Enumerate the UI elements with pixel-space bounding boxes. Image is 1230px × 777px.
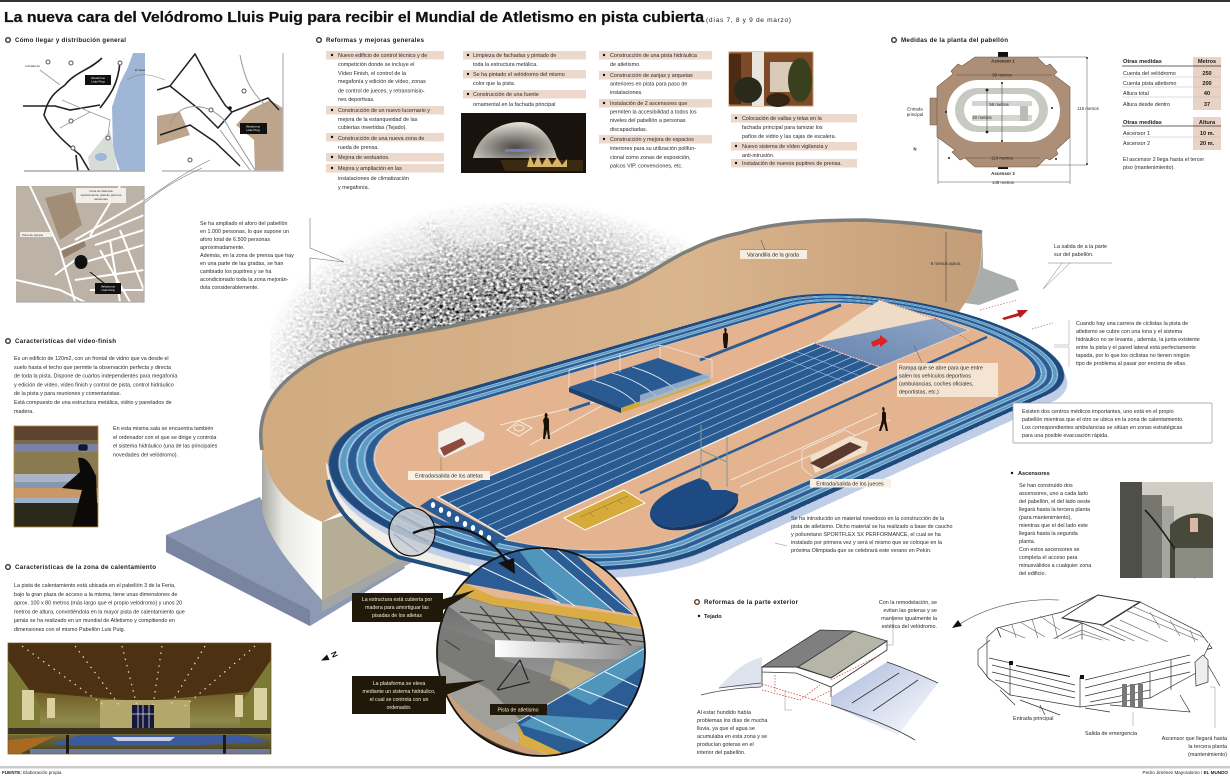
text: remodelling: evitan las goteras y se [883, 608, 937, 614]
callout: south exit pointer [1043, 263, 1112, 289]
text: new surface material [775, 516, 953, 554]
panel: exterior reforms [695, 595, 1227, 758]
body text: Se han construido dos [1019, 483, 1073, 489]
map: neighbourhood: Velodromo [101, 284, 115, 288]
label: hydraulic platform [352, 676, 485, 714]
table: other measures: 10 m. [1200, 131, 1215, 137]
bullets [331, 54, 737, 169]
plan dimension labels: 145 metros [992, 180, 1015, 185]
plan labels: Ascensor 1 [991, 58, 1015, 64]
section marker [892, 38, 896, 42]
text: capacity: aproximadamente. [200, 245, 245, 251]
text: sunken roof: producían goteras en el [697, 742, 754, 748]
label: lift: (mantenimiento) [1188, 752, 1227, 758]
map: region [19, 53, 146, 172]
column 2 text: Limpieza de fachadas y pintado de [473, 53, 556, 59]
column 2 text: toda la estructura metálica. [473, 62, 538, 68]
text: south exit: La salida de a la parte [1054, 244, 1107, 250]
label: athletes entrance [408, 458, 490, 480]
north marker [320, 650, 340, 663]
table: other measures: Otras medidas [1123, 120, 1162, 126]
table: other measures: 20 m. [1200, 141, 1215, 147]
label: judges entrance [810, 470, 891, 488]
callout box: medical [1013, 403, 1212, 443]
callout bracket: capacity [310, 218, 344, 290]
column 4 text: anti-intrusión. [742, 153, 774, 159]
table: other measures: Cuenta pista atletismo [1123, 81, 1176, 87]
table: other measures [1122, 57, 1221, 150]
body text: dimensiones con el mismo Pabellón Luis Puig. [14, 627, 125, 633]
body text: de la pista y para reuniones y comentaristas. [14, 391, 121, 397]
label: wall height: 6 metros aprox. [931, 261, 961, 266]
column 3 text: de atletismo. [610, 62, 641, 68]
label: athletes entrance: Entrada/salida de los atletas [415, 474, 483, 480]
field white lines [500, 385, 890, 487]
title dates: (días 7, 8 y 9 de marzo) [706, 17, 791, 24]
label: wood cover: pisadas de los atletas [372, 613, 422, 619]
column 1 text: Mejora de vestuarios. [338, 155, 390, 161]
column 4 text: fachada principal para tamizar los [742, 125, 823, 131]
label: ramp: (ambulancias, coches oficiales, [899, 382, 974, 388]
column 1 text: megafonía y edición de vídeo, zonas [338, 79, 426, 85]
note: lift 2: El ascensor 2 llega hasta el tercer [1123, 157, 1204, 163]
leader lines [1040, 687, 1215, 728]
body text: La pista de calentamiento está ubicada en el pabellón 3 de la Feria, [14, 583, 176, 589]
text: cyclists: Cuando hay una carrera de ciclistas la pista de [1076, 321, 1188, 327]
panel: warm-up zone [6, 564, 271, 754]
column 1 text: Mejora y ampliación en las [338, 166, 402, 172]
side text: En esta misma sala se encuentra también [113, 426, 213, 432]
side text: el sistema hidráulico (una de las principales [113, 444, 218, 450]
section marker [317, 38, 321, 42]
label: main entrance: Entrada principal [1013, 716, 1053, 722]
text: remodelling: estética del velódromo. [882, 624, 937, 630]
panel: zoom lens on hydraulic platform [352, 508, 645, 770]
athlete entry tunnel [438, 421, 485, 458]
label: ramp: Rampa que se abre para que entre [899, 366, 983, 372]
body text: minusválidos a cualquier zona [1019, 563, 1091, 569]
text: sunken roof: problemas los días de mucha [697, 718, 767, 724]
plan dimension labels: 115 metros [1077, 106, 1100, 111]
column 3 text: Construcción de zanjas y arquetas [610, 73, 693, 79]
plan dimension labels: principal [907, 112, 923, 117]
column 3 text: discapacitadas. [610, 127, 647, 133]
column 1 text: Nuevo edificio de control técnico y de [338, 53, 427, 59]
heading: Ascensores [1018, 471, 1050, 477]
arrow to lens [413, 527, 515, 574]
column 3 text: cional como zonas de exposición, [610, 155, 691, 161]
text: capacity: en una parte de las gradas, se han [200, 261, 283, 267]
column 2 text: Construcción de una fuente [473, 92, 539, 98]
label: wood cover: madera para amortiguar las [365, 605, 429, 611]
body text: llegará hasta la segunda [1019, 531, 1078, 537]
arrow: to roof detail [952, 600, 1059, 628]
heading: Reformas y mejoras generales [326, 37, 425, 44]
text: capacity: Se ha ampliado el aforo del pabellón [200, 221, 288, 227]
text: south exit: sur del pabellón. [1054, 252, 1094, 258]
table: other measures: 40 [1204, 91, 1210, 97]
opening ramp [815, 300, 975, 367]
body text: Con estos ascensores se [1019, 547, 1080, 553]
fascia black marks [1009, 661, 1084, 679]
column 1 text: instalaciones de climatización [338, 176, 409, 182]
track side wall [326, 462, 470, 575]
body text: y edición de vídeo, vídeo finish y control de pista, control hidráulico [14, 382, 174, 388]
body text: del edificio. [1019, 571, 1046, 577]
text: sunken roof: lluvia, ya que el agua se [697, 726, 755, 732]
map: neighbourhood: asistentes [94, 197, 108, 201]
drawing: pavilion exterior [978, 595, 1220, 715]
photo: illuminated dome [461, 113, 586, 173]
body text: jamás se ha realizado en un mundial de Atletismo y compitiendo en [13, 618, 175, 624]
column 3 text: niveles del pabellón a personas [610, 118, 686, 124]
body text: Está compuesto de una estructura metálica, vidrio y panelados de [14, 400, 172, 406]
column 1 text: mejora de la estanqueidad de las [338, 117, 418, 123]
body text: (para mantenimiento), [1019, 515, 1072, 521]
column 1 text: competición donde se incluye el [338, 62, 414, 68]
map: neighbourhood: Aparcamiento gratuito para los [81, 193, 122, 197]
side text: novedades del velódromo). [113, 452, 178, 458]
main straight lanes [438, 343, 880, 537]
column 3 text: Instalación de 2 ascensores que [610, 101, 687, 107]
text: new surface material: Se ha introducido un material novedoso en la construcción de la [791, 516, 944, 522]
body text: planta. [1019, 539, 1035, 545]
column 2 text: Se ha pintado el velódromo del mismo [473, 72, 565, 78]
photo: warm-up hall [8, 643, 271, 754]
footer rule [0, 766, 1230, 768]
plan dimension labels: 99 metros [992, 72, 1013, 78]
column 3 text: palcos VIP, convenciones, etc. [610, 164, 683, 170]
label: judges entrance: Entrada/salida de los jueces [816, 482, 884, 488]
athlete silhouette 3 [879, 407, 888, 431]
column 1 text: nes deportivas. [338, 97, 375, 103]
lens outline [437, 548, 645, 756]
column 4 text: paños de vidrio y las cajas de escalera. [742, 134, 836, 140]
label: ramp: salen los vehículos deportivos [899, 374, 971, 380]
athlete silhouette 2 [723, 328, 728, 348]
running track glow [332, 372, 1068, 578]
side text: el ordenador con el que se dirige y controla [113, 435, 216, 441]
long jump pit [564, 490, 645, 530]
panel: video finish [6, 338, 218, 527]
map: neighbourhood: Zona de parque [22, 233, 44, 237]
column 1 text: Construcción de una nueva zona de [338, 136, 424, 142]
north marker: N [329, 650, 340, 659]
enlarged view [437, 548, 645, 770]
column 4 text: Nuevo sistema de vídeo vigilancia y [742, 144, 828, 150]
column 2 text: ornamental en la fachada principal [473, 102, 555, 108]
column 1 text: de control de jueces, y retransmisio- [338, 88, 425, 94]
label: lift 2: Ascensor 2 [991, 171, 1015, 176]
top rule [0, 0, 1230, 2]
text: new surface material: y poliuretano SPORTFLEX SX PERFORMANCE, el cual se ha [791, 532, 941, 538]
pole vault mats [569, 345, 712, 413]
callout box: medical: pabellón mientras que el otro se ubica en la zona de calentamiento. [1022, 417, 1184, 423]
bullet [698, 615, 700, 617]
body text: madera. [14, 409, 34, 415]
source: FUENTE: Elaboración propia [2, 770, 62, 775]
athlete silhouette 1 [543, 413, 550, 439]
arrow: exit direction [980, 300, 1053, 329]
high jump mat [650, 425, 738, 530]
map: region: Velodromo [91, 76, 105, 80]
label: hydraulic platform: La plataforma se eleva [373, 681, 425, 687]
label: wall height [931, 232, 961, 302]
label: ramp [897, 345, 998, 397]
column 1 text: Construcción de un nuevo lucernario y [338, 108, 430, 114]
body text: mientras que el del lado este [1019, 523, 1088, 529]
column 1 text: cubiertas invertidas (Tejado). [338, 125, 407, 131]
text: cyclists: hidráulico no se levanta , además, la junta existente [1076, 337, 1200, 343]
plan dimension labels [907, 72, 1100, 185]
base slab under the velodrome [166, 497, 416, 626]
heading: Características del vídeo-finish [15, 338, 116, 345]
body text: completa el acceso para [1019, 555, 1077, 561]
text: capacity: cambiado los pupitres y se ha [200, 269, 271, 275]
callout box: medical: Existen dos centros médicos importantes, uno está en el propio [1022, 409, 1174, 415]
table: other measures: Metros [1198, 59, 1216, 65]
map: region: Lufriada de [25, 64, 40, 68]
table: other measures: Altura desde dentro [1123, 102, 1170, 108]
text: new surface material: próxima Olimpiada que se celebrará este verano en Pekín. [791, 548, 932, 554]
column 3 text: instalaciones. [610, 90, 643, 96]
section marker [695, 600, 699, 604]
text: sunken roof: Al estar hundido había [697, 710, 751, 716]
plan dimension labels: N [913, 146, 917, 152]
velodrome floor and banked wall [261, 220, 1019, 545]
table: other measures: Altura [1199, 120, 1216, 126]
discus circle [507, 421, 532, 436]
heading: Características de la zona de calentamiento [15, 564, 156, 571]
table: other measures: 250 [1202, 71, 1212, 77]
small detail circle [389, 508, 435, 556]
body text: bajo la gran plaza de acceso a la misma, tiene unas dimensiones de [14, 592, 177, 598]
credit: Pedro Jiménez Mayoralomo / EL MUNDO [1143, 770, 1228, 775]
table: other measures: 37 [1204, 102, 1210, 108]
label: emergency exit: Salida de emergencia [1085, 731, 1137, 737]
note: lift 2: piso (mantenimiento). [1123, 165, 1175, 171]
crowd in the stands [270, 203, 688, 390]
section marker [6, 565, 10, 569]
photo: interior room [729, 52, 813, 107]
body text: de toda la pista. Dispone de cuartos independientes para megafonía [14, 374, 177, 380]
start dots [420, 498, 506, 548]
plan drawing [930, 52, 1088, 184]
body text: aprox. 100 x 80 metros (más largo que el propio velódromo) y unos 20 [14, 601, 182, 607]
map: city [157, 53, 283, 171]
text: capacity: Además, en la zona de prensa que hay [200, 253, 294, 259]
column 1 highlight bars [326, 51, 857, 172]
table: other measures: Ascensor 2 [1123, 141, 1150, 147]
text: cyclists: atletismo se cubre con una lona y el sistema [1076, 329, 1182, 335]
text: cyclists: tapada, por lo que los ciclistas no tienen ningún [1076, 353, 1190, 359]
column 3 text: Construcción de una pista hidráulica [610, 53, 697, 59]
column 2 text: color que la pista. [473, 81, 515, 87]
panel: track field details [420, 300, 987, 548]
map: region: Lluis Puig [91, 80, 105, 84]
panel: general reforms [317, 37, 857, 191]
judges entry tunnel [802, 430, 868, 476]
text: cyclists: tipo de problema al pasar por encima de ellas. [1076, 361, 1187, 367]
text: new surface material: pista de atletismo. Dicho material se ha realizado a base de caucho [791, 524, 953, 530]
photo: control room [14, 426, 98, 527]
table: other measures: Ascensor 1 [1123, 131, 1150, 137]
drawing: roof section [701, 620, 938, 740]
label: lift: la tercera planta [1188, 744, 1227, 750]
emergency doors [1122, 684, 1143, 707]
callout bracket: cyclists [1054, 320, 1069, 367]
panel: floor plan measures [892, 37, 1221, 185]
column 3 text: anteriores en pista para paso de [610, 82, 687, 88]
column 4 text: Colocación de vallas y telas en la [742, 116, 822, 122]
map: city: Lluis Puig [246, 128, 260, 132]
title: La nueva cara del Velódromo Lluis Puig para recibir el Mundial de Atletismo en pista cubierta [4, 9, 705, 26]
callout box: medical: para una posible evacuación rápida. [1022, 433, 1109, 439]
map: neighbourhood [16, 186, 144, 302]
label: banked rim: Varandilla de la grada [747, 252, 799, 258]
text: new surface material: instalado por primera vez y será el mismo que se coloque en la [791, 540, 942, 546]
label: wood cover [352, 590, 475, 622]
body text: suelo hasta el techo que permite la observación perfecta y directa [14, 365, 171, 371]
section marker [6, 38, 10, 42]
body text: metros de altura, convirtiéndola en la mayor pista de calentamiento que [14, 609, 185, 615]
text: cyclists: entre la pista y el pared lateral está perfectamente [1076, 345, 1196, 351]
label: ramp: deportistas, etc.) [899, 390, 939, 396]
body text: llegará hasta la tercera planta [1019, 507, 1090, 513]
table: other measures: 200 [1202, 81, 1212, 87]
plan dimension labels: 110 metros [991, 156, 1014, 160]
callout box: medical: Los correspondientes ambulancias se sitúan en zonas estratégicas [1022, 425, 1183, 431]
heading: Reformas de la parte exterior [704, 599, 799, 606]
column 3 text: permiten la accesibilidad a todos los [610, 110, 697, 116]
plan dimension labels: 58 metros [989, 102, 1010, 107]
running track lanes [328, 294, 1065, 570]
label: hydraulic platform: el cual se controla con un [370, 697, 429, 703]
table: other measures: Altura total [1123, 91, 1149, 97]
body text: Es un edificio de 120m2, con un frontal de vidrio que va desde el [14, 356, 169, 362]
outer curved wall [262, 450, 322, 600]
body text: del pabellón, el del lado oeste [1019, 499, 1090, 505]
column 1 text: Vídeo Finish, el control de la [338, 71, 406, 77]
column 4 text: Instalación de nuevos pupitres de prensa. [742, 161, 842, 167]
map: city: Velodromo [246, 124, 260, 128]
label: athletics track [490, 704, 547, 715]
label: lift: Ascensor que llegará hasta [1162, 736, 1227, 742]
text: capacity: en 1.000 personas, lo que supone un [200, 229, 289, 235]
section marker [6, 339, 10, 343]
column 1 text: y megafonía. [338, 185, 369, 191]
map: neighbourhood: Lluis Puig [101, 288, 115, 292]
panel: how to get there [6, 37, 283, 302]
upper long jump lane [700, 305, 841, 360]
label: hydraulic platform: mediante un sistema hidráulico, [363, 689, 435, 695]
label: athletics track: Pista de atletismo [498, 708, 539, 714]
label: hydraulic platform: ordenador. [387, 705, 411, 711]
text: capacity: dola considerablemente. [200, 285, 259, 291]
bullet [1011, 472, 1013, 474]
column 3 text: interiores para su utilización polifun- [610, 146, 696, 152]
heading: Medidas de la planta del pabellón [901, 37, 1008, 44]
map: neighbourhood: Feria de Valencia [89, 189, 113, 193]
field lines [640, 337, 987, 493]
column 3 text: Construcción y mejora de espacios [610, 137, 694, 143]
map: region: El Saler [135, 68, 146, 72]
table: other measures: Cuenta del velódromo [1123, 71, 1176, 77]
plan dimension labels: Entrada [907, 106, 923, 112]
text: capacity: aforo total de 6.500 personas [200, 237, 270, 243]
panel: lifts [1011, 471, 1213, 578]
text: remodelling: Con la remodelación, se [879, 600, 937, 606]
label: wood cover: La estructura está cubierta por [362, 597, 432, 603]
text: remodelling: mantiene igualmente la [881, 616, 937, 622]
label: banked rim [740, 240, 807, 259]
table: other measures: Otras medidas [1123, 59, 1162, 65]
heading: Cómo llegar y distribución general [15, 37, 126, 44]
photo: lift tower [1120, 482, 1213, 578]
text: sunken roof: interior del pabellón. [697, 750, 746, 756]
column 1 text: rueda de prensa. [338, 145, 379, 151]
text: sunken roof: acumulaba en esta zona y se [697, 734, 767, 740]
body text: ascensores, uno a cada lado [1019, 491, 1088, 497]
plan dimension labels: 40 metros [972, 115, 993, 120]
subheading: Tejado [704, 614, 722, 620]
text: capacity: acondicionado toda la zona mejorán- [200, 277, 289, 283]
